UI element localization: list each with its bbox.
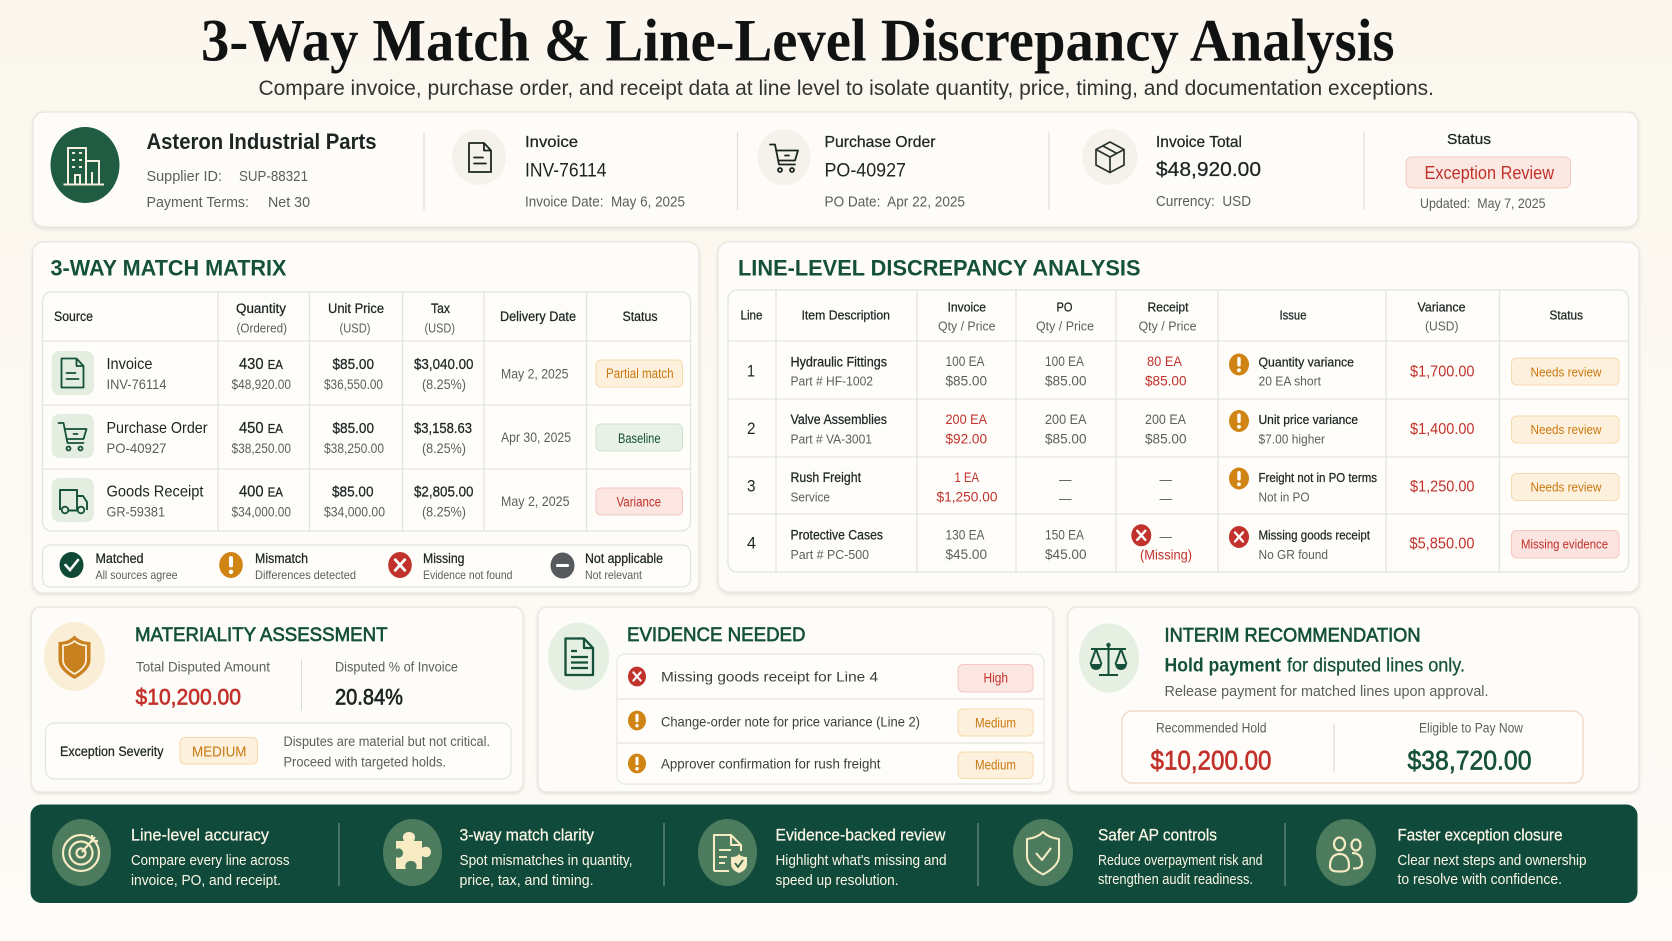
- status block: Updated: May 7, 2025: [1420, 195, 1546, 211]
- column headers: Unit Price: [328, 301, 384, 316]
- hold and pay box: Eligible to Pay Now: [1419, 720, 1523, 736]
- column headers: (USD): [424, 320, 455, 336]
- exception severity: Proceed with targeted holds.: [284, 754, 446, 770]
- invoice block: Invoice Date: May 6, 2025: [525, 194, 685, 210]
- supplier block: [50, 127, 376, 211]
- benefit: safer AP controls: [1013, 819, 1262, 888]
- row: goods receipt: 400 EA: [239, 484, 284, 500]
- icon: warning: [1229, 410, 1249, 432]
- row: invoice: (8.25%): [422, 376, 466, 392]
- panel: evidence needed: [538, 607, 1053, 792]
- icon: missing receipt: [1131, 524, 1151, 546]
- row: goods receipt: GR-59381: [106, 504, 165, 520]
- icon: puzzle: [383, 819, 442, 886]
- icon: warning: [1229, 354, 1249, 376]
- row: line 3: Freight not in PO terms: [1258, 470, 1377, 485]
- title: 3-Way Match & Line-Level Discrepancy Analysis: [201, 8, 1394, 74]
- row: line 2: 2: [747, 419, 756, 438]
- row: line 3: Rush Freight: [790, 470, 861, 485]
- row: goods receipt: $34,000.00: [232, 504, 291, 520]
- hold and pay box: [1122, 711, 1583, 783]
- column headers: Qty / Price: [1036, 320, 1094, 334]
- benefit: safer AP controls: Safer AP controls: [1098, 826, 1217, 844]
- row: line 3: —: [1059, 490, 1072, 506]
- row: line 1: 20 EA short: [1258, 374, 1321, 388]
- recommendation text: [1164, 656, 1465, 676]
- badge: needs review: Needs review: [1530, 364, 1602, 380]
- icon: scales: [1079, 624, 1139, 692]
- badge: partial match: Partial match: [606, 366, 674, 381]
- heading: LINE-LEVEL DISCREPANCY ANALYSIS: [738, 256, 1140, 280]
- row: line 2: $7.00 higher: [1258, 432, 1326, 446]
- hold and pay box: $38,720.00: [1408, 746, 1532, 776]
- legend: not applicable: [550, 551, 663, 582]
- metric: total disputed: $10,200.00: [136, 684, 241, 710]
- badge: missing evidence: [1512, 530, 1619, 558]
- row: line 2: 200 EA: [946, 411, 988, 427]
- metric: disputed percent: [335, 658, 458, 710]
- column headers: [740, 300, 1583, 334]
- evidence: change-order note: Change-order note for price variance (Line 2): [661, 714, 920, 730]
- exception severity: Disputes are material but not critical.: [284, 734, 490, 749]
- row: line 4: 4: [747, 534, 756, 552]
- row: purchase order: Apr 30, 2025: [501, 429, 571, 445]
- benefit: line-level accuracy: Compare every line across: [131, 853, 290, 869]
- row: purchase order: (8.25%): [422, 440, 466, 456]
- icon: warning: [1229, 468, 1249, 490]
- invoice total block: Currency: USD: [1156, 194, 1251, 210]
- row: line 1: 100 EA: [1045, 353, 1085, 369]
- row: invoice: [52, 351, 682, 395]
- column headers: Qty / Price: [938, 320, 996, 334]
- badge: needs review: [1512, 358, 1619, 385]
- hold and pay box: Recommended Hold: [1156, 720, 1266, 736]
- row: line 2: $85.00: [1045, 430, 1087, 446]
- icon: truck: [52, 478, 94, 522]
- row: purchase order: $85.00: [332, 421, 374, 437]
- evidence: approver confirmation: Medium: [975, 756, 1016, 772]
- column headers: Item Description: [802, 308, 890, 322]
- heading: MATERIALITY ASSESSMENT: [135, 624, 388, 646]
- legend: not applicable: Not applicable: [585, 551, 663, 566]
- badge: needs review: Needs review: [1530, 480, 1602, 494]
- icon: box: [1082, 129, 1138, 185]
- badge: baseline: [596, 424, 682, 451]
- recommendation text: for disputed lines only.: [1287, 656, 1465, 676]
- purchase order block: PO-40927: [824, 160, 906, 182]
- legend: mismatch: Differences detected: [255, 568, 356, 582]
- row: line 1: $85.00: [1145, 372, 1187, 388]
- row: line 1: 80 EA: [1147, 353, 1183, 369]
- benefit: line-level accuracy: [52, 819, 290, 889]
- row: line 1: $1,700.00: [1410, 364, 1475, 380]
- recommendation text: Hold payment: [1164, 656, 1282, 676]
- row: line 2: Unit price variance: [1258, 412, 1358, 427]
- evidence: missing goods receipt: [628, 664, 1033, 692]
- badge: needs review: [1512, 416, 1619, 443]
- supplier id: SUP-88321: [239, 168, 308, 185]
- icon: target: [52, 819, 111, 886]
- column headers: Line: [740, 308, 762, 322]
- row: line 3: $1,250.00: [936, 488, 998, 504]
- column headers: (USD): [1425, 320, 1458, 334]
- row: line 1: [747, 353, 1619, 388]
- benefit: faster exception closure: Clear next steps and ownership: [1398, 853, 1586, 869]
- subtitle: Compare invoice, purchase order, and receipt data at line level to isolate quantity, price, timing, and documentation exceptions.: [258, 76, 1434, 100]
- status block: Status: [1447, 131, 1491, 148]
- legend: missing: Missing: [423, 551, 464, 566]
- row: goods receipt: Goods Receipt: [106, 484, 204, 500]
- evidence: change-order note: Medium: [975, 714, 1016, 730]
- release note: Release payment for matched lines upon approval.: [1164, 683, 1488, 700]
- metric: disputed percent: 20.84%: [335, 684, 403, 710]
- column headers: PO: [1056, 300, 1072, 314]
- evidence: missing goods receipt: Missing goods receipt for Line 4: [661, 670, 879, 684]
- column headers: Delivery Date: [500, 309, 576, 324]
- column headers: Variance: [1418, 300, 1466, 314]
- benefit: safer AP controls: strengthen audit readiness.: [1098, 872, 1253, 888]
- row: line 4: —: [1160, 528, 1172, 544]
- invoice total block: [1082, 129, 1261, 210]
- row: line 2: $1,400.00: [1410, 421, 1475, 438]
- column headers: Tax: [431, 301, 450, 316]
- row: purchase order: $38,250.00: [324, 441, 384, 456]
- icon: shield: [44, 622, 105, 691]
- exception severity: Exception Severity: [60, 744, 164, 759]
- row: line 1: $85.00: [1045, 372, 1087, 388]
- heading: 3-WAY MATCH MATRIX: [50, 256, 287, 280]
- invoice block: Invoice: [525, 134, 578, 151]
- row: line 4: [747, 524, 1619, 562]
- row: invoice: 430 EA: [239, 356, 284, 373]
- column headers: Qty / Price: [1138, 320, 1197, 334]
- benefit: faster exception closure: to resolve with confidence.: [1398, 872, 1562, 888]
- icon: missing: [1229, 526, 1249, 548]
- evidence: approver confirmation: Approver confirmation for rush freight: [661, 756, 881, 772]
- column headers: Invoice: [948, 300, 986, 314]
- benefit: 3-way match clarity: Spot mismatches in quantity,: [460, 853, 632, 869]
- row: invoice: $48,920.00: [232, 377, 291, 392]
- row: line 3: 1 EA: [954, 469, 980, 485]
- matrix table: [42, 292, 690, 531]
- purchase order block: [758, 129, 965, 210]
- legend: matched: All sources agree: [96, 568, 178, 582]
- icon: people: [1316, 819, 1376, 886]
- exception severity: [46, 723, 511, 779]
- badge: missing evidence: Missing evidence: [1521, 536, 1608, 552]
- legend: not applicable: Not relevant: [585, 568, 643, 582]
- icon: building: [50, 127, 120, 203]
- column headers: Source: [54, 309, 93, 324]
- column headers: (Ordered): [236, 320, 287, 336]
- row: line 2: 200 EA: [1145, 411, 1187, 427]
- row: line 2: [747, 410, 1619, 446]
- row: line 3: Not in PO: [1258, 490, 1310, 504]
- payment terms: Payment Terms:: [146, 194, 249, 211]
- row: line 3: 3: [747, 476, 756, 496]
- row: line 2: $85.00: [1145, 430, 1187, 446]
- purchase order block: PO Date: Apr 22, 2025: [824, 194, 965, 210]
- evidence: approver confirmation: [628, 752, 1033, 778]
- benefit: 3-way match clarity: [383, 819, 632, 889]
- row: line 4: (Missing): [1140, 546, 1192, 562]
- row: line 3: $1,250.00: [1410, 478, 1475, 496]
- benefit: safer AP controls: Reduce overpayment risk and: [1098, 853, 1262, 869]
- legend: matched: [60, 551, 178, 582]
- benefit: 3-way match clarity: price, tax, and timing.: [460, 873, 594, 889]
- legend: mismatch: Mismatch: [255, 551, 308, 566]
- benefit: evidence-backed review: Highlight what's missing and: [776, 853, 946, 869]
- badge: baseline: Baseline: [618, 431, 660, 446]
- row: purchase order: $3,158.63: [414, 421, 472, 437]
- benefit: evidence-backed review: [698, 819, 946, 889]
- legend: missing: Evidence not found: [423, 568, 512, 582]
- payment terms: Net 30: [268, 194, 310, 211]
- row: line 3: [747, 468, 1619, 506]
- icon: cart: [758, 129, 810, 185]
- legend: mismatch: [219, 551, 356, 582]
- discrepancy table: [728, 290, 1628, 572]
- row: line 3: —: [1160, 471, 1172, 487]
- badge: needs review: [1512, 474, 1619, 500]
- row: purchase order: Purchase Order: [106, 420, 208, 437]
- row: invoice: INV-76114: [106, 376, 167, 392]
- row: invoice: $3,040.00: [414, 357, 474, 373]
- row: line 3: —: [1160, 490, 1172, 506]
- row: goods receipt: $34,000.00: [324, 504, 385, 520]
- panel: materiality assessment: [32, 607, 523, 792]
- payment terms: [146, 194, 310, 211]
- heading: EVIDENCE NEEDED: [627, 624, 806, 646]
- panel: invoice header summary: [33, 112, 1638, 227]
- legend: missing: [388, 551, 512, 582]
- evidence: change-order note: [628, 709, 1033, 736]
- row: invoice: May 2, 2025: [501, 366, 569, 382]
- row: line 4: Part # PC-500: [790, 547, 869, 562]
- benefit: faster exception closure: [1316, 819, 1586, 888]
- row: line 4: No GR found: [1258, 547, 1328, 562]
- metric: disputed percent: Disputed % of Invoice: [335, 658, 458, 674]
- evidence: missing goods receipt: High: [984, 670, 1008, 686]
- badge: partial match: [596, 360, 682, 387]
- icon: document with shield: [698, 819, 757, 886]
- row: purchase order: PO-40927: [106, 440, 167, 456]
- invoice block: [452, 129, 685, 210]
- benefit: faster exception closure: Faster exception closure: [1398, 826, 1562, 844]
- row: line 1: $85.00: [946, 372, 987, 388]
- column headers: (USD): [340, 320, 370, 336]
- benefit: evidence-backed review: speed up resolution.: [776, 873, 898, 889]
- row: invoice: $36,550.00: [324, 377, 383, 392]
- row: line 1: Part # HF-1002: [790, 374, 873, 388]
- badge: variance: [596, 488, 682, 515]
- row: invoice: $85.00: [332, 357, 374, 373]
- row: goods receipt: May 2, 2025: [501, 493, 570, 509]
- badge: variance: Variance: [616, 494, 661, 510]
- panel: 3-way match matrix: [32, 242, 699, 593]
- metric: total disputed: Total Disputed Amount: [136, 658, 270, 674]
- badge: exception review: [1406, 157, 1570, 188]
- benefit: evidence-backed review: Evidence-backed review: [776, 826, 946, 844]
- benefit: 3-way match clarity: 3-way match clarity: [460, 826, 594, 844]
- panel: benefits footer band: [30, 804, 1638, 903]
- legend: matched: Matched: [96, 551, 144, 566]
- row: line 3: —: [1059, 471, 1072, 487]
- row: line 1: 100 EA: [946, 353, 985, 369]
- supplier name: Asteron Industrial Parts: [146, 129, 376, 154]
- row: line 2: Part # VA-3001: [790, 432, 872, 446]
- row: line 2: Valve Assemblies: [790, 412, 887, 427]
- legend: [42, 545, 690, 587]
- panel: line-level discrepancy analysis: [718, 242, 1639, 592]
- row: purchase order: [52, 414, 682, 458]
- benefit: line-level accuracy: invoice, PO, and receipt.: [131, 873, 281, 889]
- row: goods receipt: [52, 478, 682, 522]
- row: line 4: 150 EA: [1045, 526, 1085, 542]
- row: line 4: $45.00: [946, 546, 987, 562]
- row: goods receipt: $85.00: [332, 484, 374, 500]
- purchase order block: Purchase Order: [824, 134, 936, 151]
- hold and pay box: $10,200.00: [1150, 746, 1272, 776]
- badge: exception review: Exception Review: [1424, 163, 1555, 183]
- icon: document: [548, 622, 609, 690]
- row: line 1: Hydraulic Fittings: [790, 354, 887, 370]
- row: goods receipt: (8.25%): [422, 504, 466, 520]
- row: line 4: $45.00: [1045, 546, 1087, 562]
- invoice block: INV-76114: [525, 160, 607, 182]
- panel: interim recommendation: [1068, 607, 1639, 792]
- column headers: Quantity: [236, 301, 286, 316]
- row: invoice: Invoice: [106, 356, 153, 373]
- icon: invoice document: [452, 129, 506, 185]
- column headers: Status: [622, 309, 658, 324]
- supplier id: Supplier ID:: [146, 168, 222, 185]
- metric: total disputed: [136, 658, 270, 710]
- row: line 2: $92.00: [946, 430, 987, 446]
- badge: medium: [180, 738, 258, 764]
- status block: [1406, 131, 1570, 211]
- supplier id: [146, 168, 308, 185]
- icon: invoice: [52, 351, 94, 395]
- column headers: Receipt: [1148, 300, 1189, 314]
- row: goods receipt: $2,805.00: [414, 484, 474, 500]
- column headers: Issue: [1280, 308, 1306, 322]
- icon: cart: [52, 414, 94, 458]
- benefit: line-level accuracy: Line-level accuracy: [131, 826, 269, 844]
- row: line 1: 1: [747, 362, 755, 380]
- row: line 1: Quantity variance: [1258, 354, 1354, 370]
- row: line 4: Protective Cases: [790, 528, 883, 542]
- icon: shield check: [1013, 819, 1073, 886]
- row: line 4: $5,850.00: [1410, 536, 1475, 552]
- row: line 4: 130 EA: [946, 526, 985, 542]
- column headers: [54, 301, 658, 336]
- badge: needs review: Needs review: [1530, 422, 1602, 437]
- badge: medium: MEDIUM: [192, 744, 246, 760]
- invoice total block: $48,920.00: [1156, 159, 1261, 181]
- row: purchase order: 450 EA: [239, 420, 284, 437]
- heading: INTERIM RECOMMENDATION: [1164, 624, 1420, 646]
- row: line 2: 200 EA: [1045, 411, 1087, 427]
- row: line 4: Missing goods receipt: [1258, 528, 1370, 542]
- evidence list: [617, 654, 1044, 784]
- invoice total block: Invoice Total: [1156, 134, 1242, 151]
- row: purchase order: $38,250.00: [232, 441, 291, 456]
- column headers: Status: [1550, 308, 1583, 322]
- row: line 3: Service: [790, 490, 830, 504]
